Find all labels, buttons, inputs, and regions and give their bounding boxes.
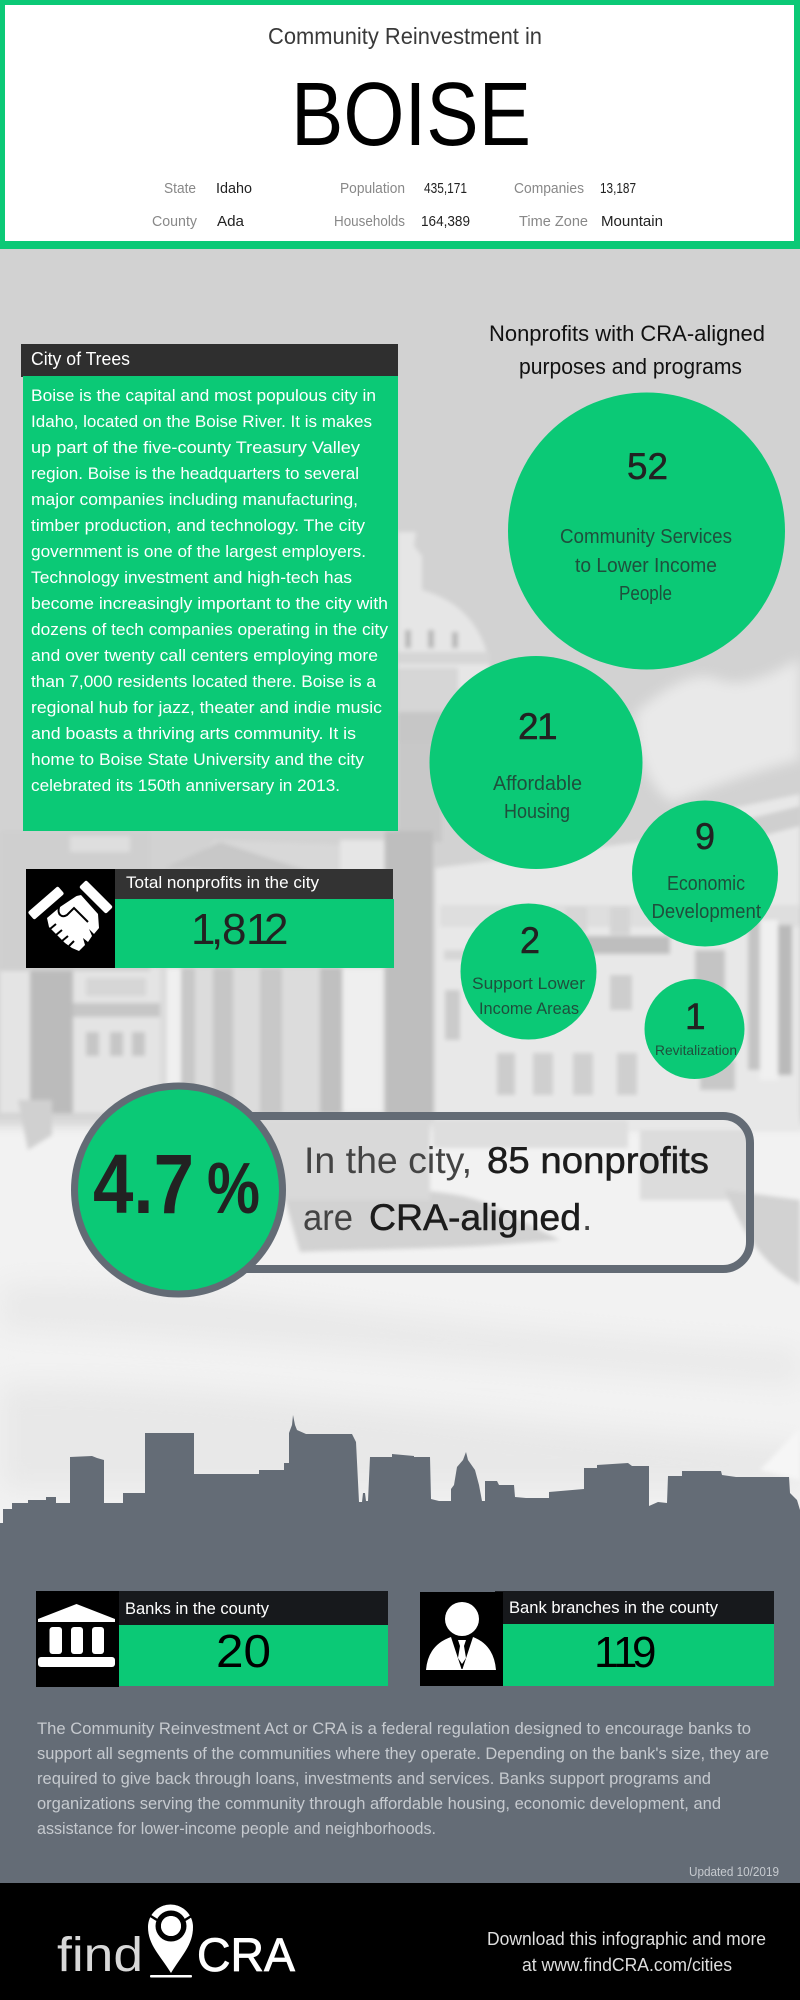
callout: share of CRA-aligned nonprofits <box>74 1086 750 1294</box>
city description: government is one of the largest employers. <box>31 543 366 561</box>
bubble: support lower income areas 2: Support Lower <box>472 975 586 993</box>
callout sentence: 85 nonprofits <box>487 1140 709 1181</box>
trees and road <box>18 1100 52 1150</box>
city facts: 164,389 <box>421 214 470 230</box>
city description: regional hub for jazz, theater and indie music <box>31 699 382 717</box>
skyline and lower panel <box>0 1415 800 1884</box>
download call to action: Download this infographic and more <box>487 1929 766 1949</box>
download call to action: at www.findCRA.com/cities <box>522 1955 732 1975</box>
bubble: economic development 9 <box>632 800 778 946</box>
card label: Bank branches in the county <box>509 1598 718 1617</box>
callout sentence <box>303 1140 709 1238</box>
panel: City of Trees <box>21 344 398 831</box>
city facts: Ada <box>217 214 245 230</box>
percentage: 4.7 <box>93 1137 194 1231</box>
main building, right wing <box>435 794 800 1130</box>
city description: region. Boise is the headquarters to several <box>31 465 359 483</box>
stat card: total nonprofits <box>26 869 394 968</box>
icon: handshake <box>28 880 113 951</box>
card value: 20 <box>216 1625 271 1677</box>
bubble: community services 52 <box>508 392 785 670</box>
city facts: Idaho <box>216 181 252 197</box>
bubble: community services 52: to Lower Income <box>575 555 717 577</box>
city description: Boise is the capital and most populous city in <box>31 387 376 405</box>
bubble: revitalization 1: Revitalization <box>655 1042 737 1058</box>
bubble: affordable housing 21 <box>430 656 642 869</box>
city description: major companies including manufacturing, <box>31 491 358 509</box>
city facts: 13,187 <box>600 181 636 197</box>
bubble: affordable housing 21: Housing <box>504 801 570 823</box>
icon: bank <box>38 1604 115 1667</box>
heading: nonprofits <box>489 321 765 379</box>
percentage: % <box>207 1149 260 1229</box>
callout sentence: In the city, <box>304 1140 472 1181</box>
city description: Technology investment and high-tech has <box>31 569 352 587</box>
bubble: community services 52: 52 <box>627 446 668 487</box>
left wing <box>0 968 160 1113</box>
city description: and over twenty call centers employing more <box>31 647 378 665</box>
update date: Updated 10/2019 <box>689 1864 779 1879</box>
explanatory paragraph <box>37 1719 769 1838</box>
city description: than 7,000 residents located there. Boise is a <box>31 673 377 691</box>
city description: timber production, and technology. The city <box>31 517 366 535</box>
header panel <box>0 0 800 249</box>
card label: Total nonprofits in the city <box>126 873 319 892</box>
explanatory paragraph: The Community Reinvestment Act or CRA is a federal regulation designed to encourage banks to <box>37 1719 751 1738</box>
logo: findCRA <box>57 1905 296 1982</box>
bubble: revitalization 1: 1 <box>685 996 706 1037</box>
bubble: economic development 9: Economic <box>667 873 745 895</box>
bubble: economic development 9: 9 <box>695 816 715 857</box>
percentage <box>93 1137 260 1231</box>
heading: nonprofits: Nonprofits with CRA-aligned <box>489 321 765 346</box>
city facts: County <box>152 214 198 230</box>
card value: 119 <box>594 1628 656 1677</box>
city facts: Companies <box>514 181 584 197</box>
callout sentence: are <box>303 1197 353 1238</box>
city facts: 435,171 <box>424 181 467 197</box>
bubble: revitalization 1 <box>644 979 744 1079</box>
logo: findCRA: find <box>57 1929 143 1982</box>
city facts: Mountain <box>601 214 663 230</box>
city description: and boasts a thriving arts community. It is <box>31 725 356 743</box>
stat card: bank branches in the county <box>420 1591 774 1686</box>
stat card: banks in the county <box>36 1591 388 1687</box>
header subtitle: Community Reinvestment in <box>268 23 542 49</box>
download call to action <box>487 1929 766 1975</box>
bubble: affordable housing 21: 21 <box>518 706 558 747</box>
bubble: community services 52: Community Services <box>560 526 732 548</box>
city title: BOISE <box>291 65 531 165</box>
panel heading: City of Trees <box>31 349 130 369</box>
background photo: Idaho capitol building <box>0 249 800 1570</box>
explanatory paragraph: support all segments of the communities where they operate. Depending on the bank's size, they are <box>37 1744 769 1763</box>
bubble: community services 52: People <box>619 583 672 605</box>
callout sentence: CRA-aligned <box>369 1197 581 1238</box>
icon: banker <box>426 1602 496 1670</box>
callout sentence: . <box>582 1197 592 1238</box>
bubble: support lower income areas 2 <box>460 904 596 1040</box>
heading: nonprofits: purposes and programs <box>519 354 742 379</box>
dark tree column <box>385 831 433 1116</box>
city facts: State <box>164 181 196 197</box>
logo: findCRA: CRA <box>197 1928 296 1981</box>
pediment and portico <box>150 840 385 970</box>
explanatory paragraph: assistance for lower-income people and neighborhoods. <box>37 1819 436 1838</box>
city facts: Time Zone <box>519 214 588 230</box>
dome <box>398 532 490 690</box>
city facts: Population <box>340 181 405 197</box>
bubble: affordable housing 21: Affordable <box>493 773 582 795</box>
card label: Banks in the county <box>125 1599 269 1618</box>
city description: dozens of tech companies operating in the city <box>31 621 389 639</box>
city facts <box>152 181 663 230</box>
city description: become increasingly important to the city with <box>31 595 388 613</box>
city description: celebrated its 150th anniversary in 2013. <box>31 777 340 795</box>
city description: up part of the five-county Treasury Valley <box>31 439 361 457</box>
city description: Idaho, located on the Boise River. It is makes <box>31 413 372 431</box>
footer <box>0 1883 800 2000</box>
explanatory paragraph: organizations serving the community through affordable housing, economic development, and <box>37 1794 721 1813</box>
city description <box>31 387 389 795</box>
city facts: Households <box>334 214 405 230</box>
card value: 1,812 <box>191 905 288 954</box>
bubble: support lower income areas 2: 2 <box>520 920 540 961</box>
city description: home to Boise State University and the city <box>31 751 365 769</box>
bubble: economic development 9: Development <box>652 901 761 923</box>
explanatory paragraph: required to give back through loans, investments and services. Banks support programs and <box>37 1769 711 1788</box>
bubble: support lower income areas 2: Income Areas <box>479 1000 579 1018</box>
